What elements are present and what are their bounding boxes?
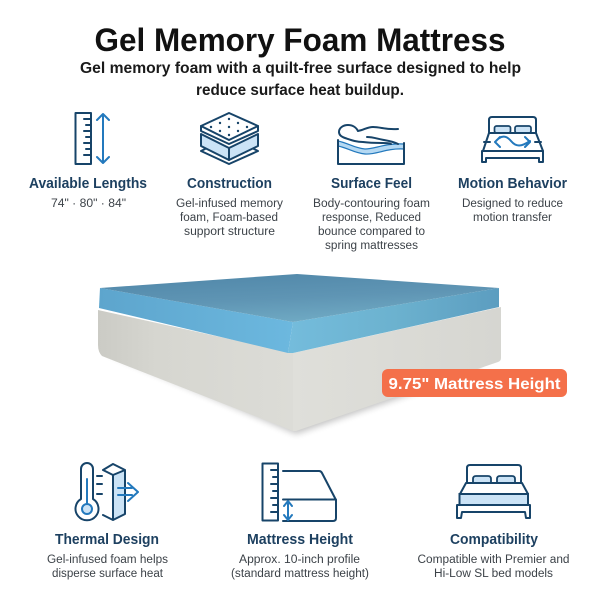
text: compatibility: Compatible with Premier and xyxy=(418,554,570,566)
panel: thermal design xyxy=(47,463,168,580)
panel: surface feel xyxy=(313,125,430,252)
subtitle xyxy=(80,60,521,99)
icon: ruler with vertical arrow xyxy=(76,113,109,164)
text: compatibility xyxy=(418,554,570,580)
panel: motion behavior xyxy=(458,117,567,224)
panel: construction xyxy=(176,113,283,238)
text: surface feel xyxy=(313,198,430,252)
text: construction xyxy=(176,198,283,238)
text: surface feel: bounce compared to xyxy=(318,226,425,238)
text: surface feel: response, Reduced xyxy=(322,212,421,224)
heading: thermal design: Thermal Design xyxy=(55,532,159,548)
icon: body on contouring foam xyxy=(338,125,404,164)
heading: motion behavior: Motion Behavior xyxy=(458,176,567,192)
callout: mattress height: 9.75" Mattress Height xyxy=(388,376,561,393)
heading: compatibility: Compatibility xyxy=(450,532,538,548)
heading: mattress height: Mattress Height xyxy=(247,532,353,548)
icon: ruler and mattress profile xyxy=(262,464,336,521)
text: lengths: 74" · 80" · 84" xyxy=(51,198,126,210)
text: thermal design: Gel-infused foam helps xyxy=(47,554,168,566)
text: compatibility: Hi-Low SL bed models xyxy=(434,568,553,580)
panel: mattress height xyxy=(231,464,369,580)
text: construction: Gel-infused memory xyxy=(176,198,283,210)
icon: bed with motion wave xyxy=(482,117,543,162)
text: mattress height xyxy=(231,554,369,580)
text: mattress height: Approx. 10-inch profile xyxy=(239,554,360,566)
heading: construction: Construction xyxy=(187,176,272,192)
panel: available lengths xyxy=(29,113,147,210)
text: motion behavior: motion transfer xyxy=(473,212,552,224)
heading: available lengths: Available Lengths xyxy=(29,176,147,192)
text: construction: support structure xyxy=(184,226,275,238)
text: thermal design: disperse surface heat xyxy=(52,568,164,580)
heading: surface feel: Surface Feel xyxy=(331,176,412,192)
icon: foam layers xyxy=(201,113,258,164)
callout: mattress height xyxy=(382,369,567,397)
icon: bed xyxy=(457,465,530,518)
panel: compatibility xyxy=(418,465,570,580)
title: Gel Memory Foam Mattress xyxy=(94,22,506,58)
text: surface feel: spring mattresses xyxy=(325,240,418,252)
subtitle: reduce surface heat buildup. xyxy=(196,82,404,99)
text: thermal design xyxy=(47,554,168,580)
image: two-layer mattress xyxy=(98,274,501,434)
text: motion behavior xyxy=(462,198,563,224)
text: surface feel: Body-contouring foam xyxy=(313,198,430,210)
subtitle: Gel memory foam with a quilt-free surface designed to help xyxy=(80,60,521,77)
text: mattress height: (standard mattress height) xyxy=(231,568,369,580)
text: construction: foam, Foam-based xyxy=(180,212,278,224)
text: motion behavior: Designed to reduce xyxy=(462,198,563,210)
icon: thermometer and heat arrow xyxy=(76,463,138,520)
